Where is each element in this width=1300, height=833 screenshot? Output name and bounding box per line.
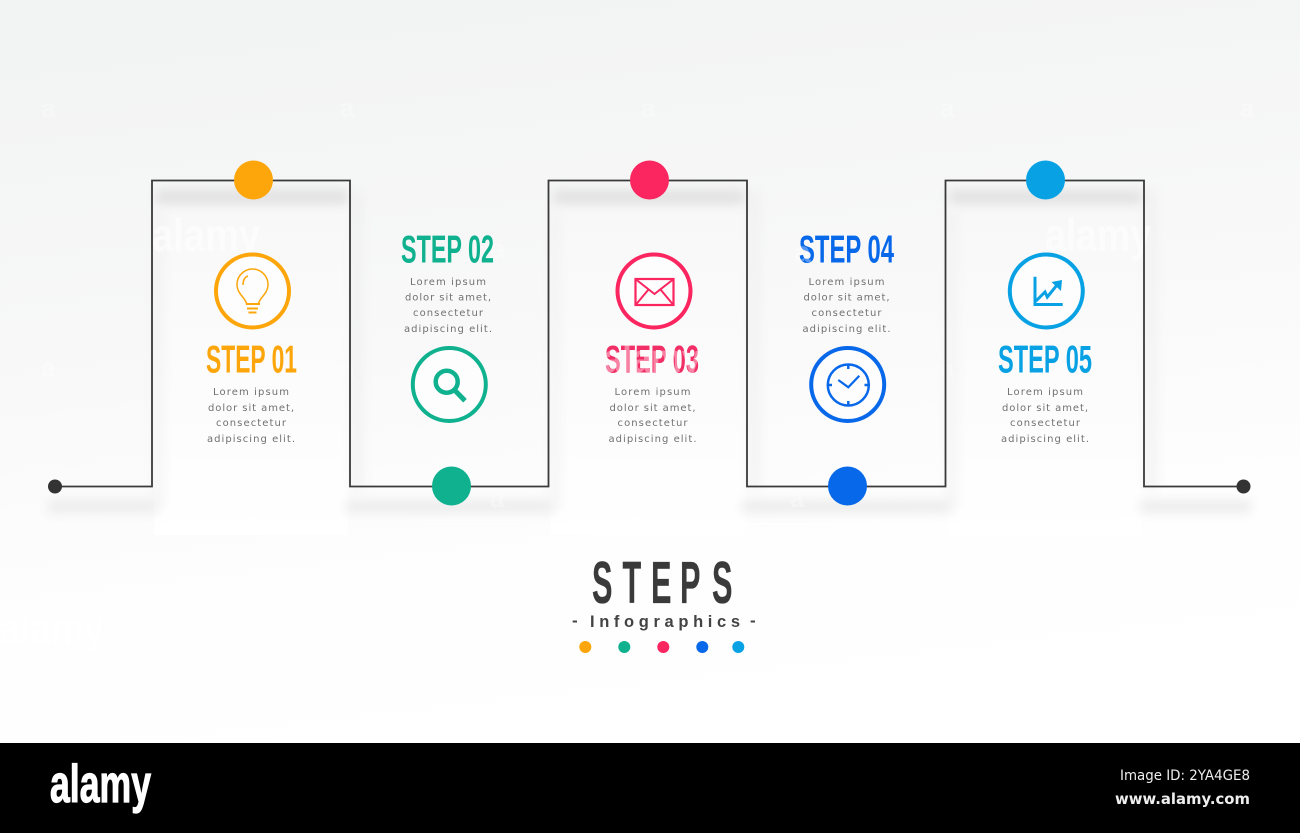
stock watermarks: a	[191, 483, 206, 513]
watermark overlay on headings: a	[794, 236, 811, 269]
text: step 02 description: dolor sit amet,	[405, 292, 491, 304]
text: step 03 description: dolor sit amet,	[610, 403, 696, 414]
title: STEPS: S	[592, 549, 612, 616]
text: step 02 description: consectetur	[413, 308, 484, 319]
icon: growth chart	[1010, 254, 1083, 328]
timeline path	[55, 180, 1243, 486]
text: step 03 description: Lorem ipsum	[614, 387, 690, 398]
title: STEPS	[592, 549, 732, 616]
heading: step 05: STEP 05	[998, 338, 1092, 382]
text: step 01 description: Lorem ipsum	[213, 387, 289, 398]
heading: step 04: STEP 04	[799, 228, 894, 272]
subtitle: Infographics: -	[750, 611, 756, 630]
title: STEPS: P	[680, 549, 700, 616]
text: step 04 description: Lorem ipsum	[808, 277, 884, 288]
panel: step 05	[998, 254, 1092, 445]
stock watermarks: a	[1240, 353, 1255, 383]
text: step 05 description: consectetur	[1010, 418, 1081, 429]
text: step 03 description: consectetur	[618, 418, 688, 429]
footer: website: www.alamy.com	[1115, 790, 1250, 808]
node: step 04	[828, 466, 867, 506]
start node	[48, 480, 62, 494]
watermark overlay on headings: a	[490, 233, 506, 264]
text: step 04 description: adipiscing elit.	[802, 324, 890, 335]
subtitle: Infographics: -	[572, 611, 578, 630]
stock watermarks: a	[940, 93, 955, 123]
subtitle: Infographics: Infographics	[590, 613, 740, 631]
stock watermarks: a	[1240, 93, 1255, 123]
text: step 01 description	[207, 387, 295, 445]
text: step 05 description	[1001, 387, 1089, 445]
node: step 02	[432, 466, 471, 506]
stock watermarks: a	[641, 93, 656, 123]
icon: magnifying glass	[413, 348, 486, 421]
heading: step 02: STEP 02	[401, 228, 494, 272]
text: step 03 description: adipiscing elit.	[608, 434, 696, 445]
panel: step 04	[799, 228, 894, 421]
stock watermarks: alamy	[1045, 209, 1151, 261]
stock watermarks: a	[41, 353, 56, 383]
text: step 01 description: adipiscing elit.	[207, 434, 295, 445]
text: step 05 description: dolor sit amet,	[1002, 403, 1088, 414]
text: step 02 description: adipiscing elit.	[404, 324, 492, 335]
panel: step 02	[401, 228, 494, 421]
legend dots	[579, 641, 744, 653]
footer: image id: Image ID: 2YA4GE8	[1120, 768, 1250, 784]
end node	[1236, 480, 1250, 494]
footer band	[0, 743, 1300, 833]
title: STEPS: E	[651, 549, 671, 616]
text: step 05 description: adipiscing elit.	[1001, 434, 1089, 445]
text: step 02 description	[404, 277, 492, 335]
text: step 05 description: Lorem ipsum	[1007, 387, 1083, 398]
watermark overlay on headings	[490, 233, 811, 381]
node: step 01	[234, 160, 273, 200]
text: step 04 description: dolor sit amet,	[804, 292, 890, 304]
title: STEPS: S	[712, 549, 732, 616]
icon: clock	[811, 348, 884, 421]
panel shading and drop shadows	[48, 190, 1251, 535]
stock watermarks: a	[790, 483, 805, 513]
stock watermarks: a	[340, 353, 355, 383]
stock watermarks: a	[490, 483, 505, 513]
stock watermarks	[0, 93, 1255, 654]
stock watermarks: alamy	[0, 602, 104, 654]
node: step 03	[630, 160, 669, 200]
text: step 01 description: dolor sit amet,	[208, 403, 294, 414]
text: step 01 description: consectetur	[216, 418, 287, 429]
stock watermarks: a	[340, 93, 355, 123]
text: step 02 description: Lorem ipsum	[410, 277, 486, 288]
node: step 05	[1026, 160, 1065, 200]
title: STEPS: T	[622, 549, 641, 616]
icon: envelope	[618, 254, 690, 328]
stock watermarks: alamy	[152, 209, 260, 261]
heading: step 03: STEP 03	[605, 338, 699, 382]
text: step 03 description	[608, 387, 696, 445]
footer logo: alamy: alamy	[50, 755, 151, 814]
text: step 04 description	[802, 277, 890, 335]
stock watermarks: a	[940, 353, 955, 383]
panel: step 03	[605, 254, 699, 445]
heading: step 01: STEP 01	[206, 338, 297, 382]
panel: step 01	[206, 254, 297, 445]
stock watermarks: a	[41, 93, 56, 123]
icon: light bulb	[216, 254, 289, 328]
watermark overlay on headings: alamy	[603, 337, 702, 381]
text: step 04 description: consectetur	[812, 308, 882, 319]
